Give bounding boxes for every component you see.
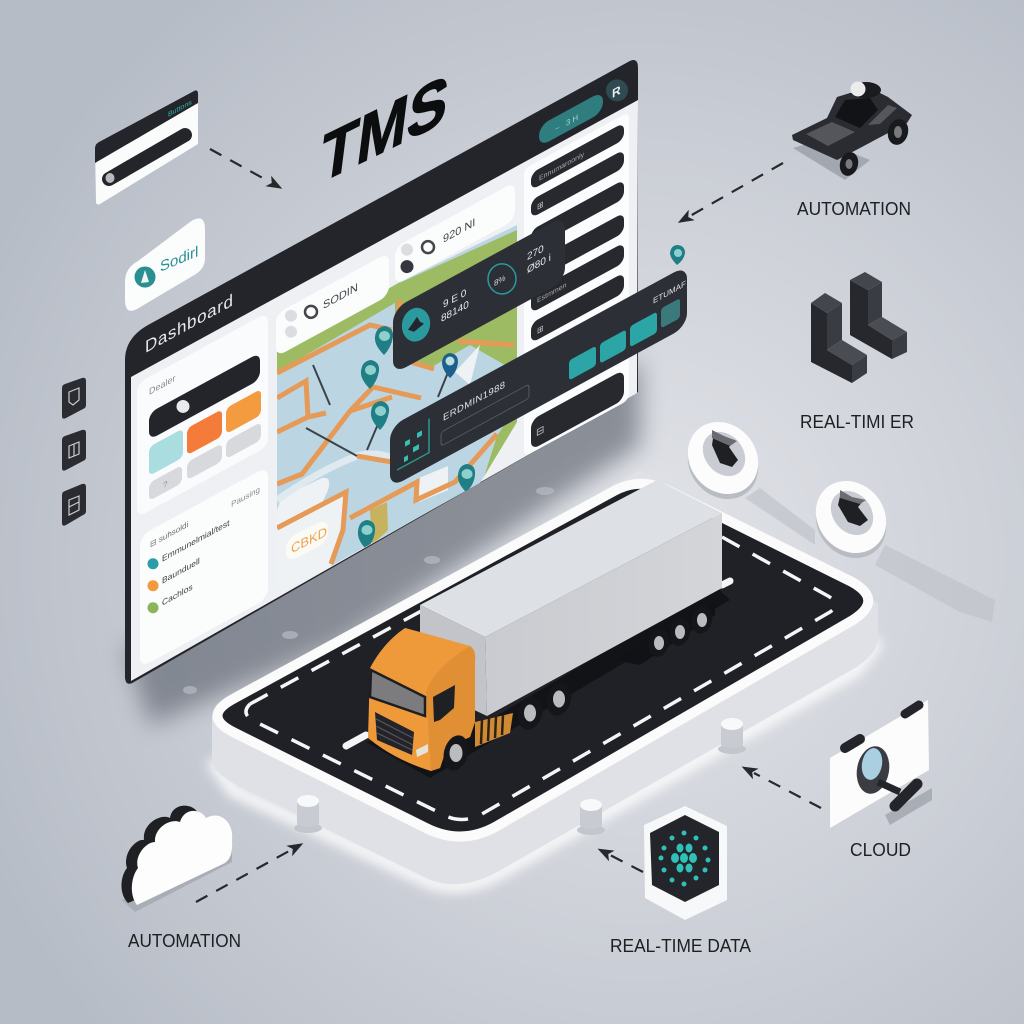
tile red orange <box>187 409 222 455</box>
tile gray one <box>149 465 182 501</box>
arrow: automation to dashboard <box>690 163 783 216</box>
row five: Estmmen <box>537 280 567 305</box>
cab body <box>368 628 475 771</box>
list row two <box>148 552 200 597</box>
dark dot <box>400 260 414 273</box>
map pin two <box>361 360 379 389</box>
teal square icon <box>397 419 429 470</box>
widget search dot <box>106 173 114 183</box>
panel: status card <box>137 312 268 517</box>
floating card: shipment stats <box>393 216 565 374</box>
tile marks: ? <box>163 478 168 490</box>
card: sodirl logo <box>125 218 205 311</box>
card label: 920 NI <box>443 216 475 246</box>
list row one <box>148 513 230 575</box>
card label: SODIN <box>323 281 358 312</box>
fuel tank <box>475 713 513 747</box>
header pill <box>539 91 603 147</box>
disc sensor one <box>673 408 773 513</box>
ring text: 8% <box>494 272 506 288</box>
label: dealer: Dealer <box>149 373 176 398</box>
list row two: Baunduell <box>162 556 200 586</box>
icon: real-time data chip <box>644 806 727 920</box>
ring icon <box>422 241 434 253</box>
middle wheels <box>514 679 575 733</box>
handle <box>878 782 900 792</box>
chip ring dots <box>658 830 710 886</box>
side window <box>433 685 455 722</box>
label: real-time er: REAL-TIMI ER <box>800 412 914 432</box>
vehicle shadow <box>793 140 870 180</box>
tile orange <box>226 389 261 434</box>
header button glyph: R <box>612 82 621 101</box>
platform base <box>212 470 878 884</box>
gray dot <box>401 244 413 256</box>
stat text two: Ø80 i <box>527 252 551 276</box>
vehicle dome <box>835 98 878 128</box>
icon: robot vehicle <box>792 82 912 180</box>
card: sodin <box>276 252 389 357</box>
button four <box>661 298 680 328</box>
side icon three <box>62 484 86 526</box>
status dot <box>176 400 190 413</box>
logo figure <box>141 270 149 283</box>
map orange roads <box>277 300 514 564</box>
vehicle body <box>792 93 912 160</box>
windshield <box>370 670 425 716</box>
widget search bar <box>109 135 185 179</box>
rear wheel hub <box>894 126 902 138</box>
arrow: camera to platform <box>754 773 821 808</box>
input field <box>441 384 529 446</box>
block front <box>811 293 867 383</box>
row one: Ennumaroonly <box>539 150 584 183</box>
row three <box>531 180 624 249</box>
chip inner <box>650 815 719 902</box>
vehicle deck <box>806 122 855 146</box>
tile teal <box>149 428 183 476</box>
road stub front <box>346 735 366 746</box>
teal ring <box>488 264 516 294</box>
row six <box>531 273 624 343</box>
list row three <box>148 577 193 619</box>
road surface <box>218 484 868 837</box>
cab <box>368 628 475 773</box>
row six: ⊞ <box>537 323 544 336</box>
dashboard body <box>131 100 638 681</box>
decorative footprints <box>183 487 554 694</box>
teal icon <box>399 305 433 344</box>
pin above controls card <box>670 245 685 265</box>
stat text two: 270 <box>527 243 544 263</box>
lens <box>853 744 893 796</box>
truck glyph <box>408 317 424 332</box>
floating card: controls <box>390 265 687 488</box>
icon: cloud <box>121 806 232 912</box>
map <box>270 220 525 600</box>
button one <box>569 346 596 380</box>
road dashes <box>246 502 836 820</box>
chip center dots <box>671 844 697 872</box>
vehicle side window <box>868 105 897 125</box>
card: search widget <box>95 90 198 205</box>
top cap <box>851 82 881 98</box>
platform <box>212 470 878 886</box>
label: automation top: AUTOMATION <box>797 199 911 219</box>
vehicle top ball <box>850 82 866 96</box>
disc shadows <box>745 488 995 622</box>
cloud shadow <box>122 848 232 912</box>
tile gray two <box>187 443 222 480</box>
shadow of dashboard panel <box>125 360 640 725</box>
row seven: ⊟ <box>536 423 544 439</box>
header label: dashboard: Dashboard <box>145 290 234 357</box>
platform glow <box>212 640 878 886</box>
label: ERDMIN1988 <box>443 380 505 424</box>
stat text one <box>441 286 469 325</box>
stat text two <box>527 239 551 276</box>
trailer side <box>485 513 722 716</box>
widget header <box>95 90 198 163</box>
list row one: Emmunelmial/test <box>162 517 230 564</box>
label: real-time data: REAL-TIME DATA <box>610 936 751 956</box>
side icon two <box>62 430 86 471</box>
grille <box>375 712 414 755</box>
row four <box>531 213 624 283</box>
map pin six <box>358 520 375 549</box>
tab right <box>905 705 919 714</box>
stat text one: 9 E 0 <box>443 287 466 311</box>
truck shadow <box>366 586 730 778</box>
title: TMS <box>316 59 453 199</box>
card shadow <box>885 788 932 825</box>
tab left <box>845 739 860 748</box>
truck <box>366 480 730 778</box>
handle grip <box>895 784 917 806</box>
stat text one: 88140 <box>441 299 469 325</box>
widget title: Buttons <box>168 97 192 119</box>
grille lines <box>376 719 413 750</box>
side icon one <box>62 378 86 419</box>
label: subtitle: ⊟ suhsoldi <box>150 519 188 549</box>
row two <box>531 150 624 218</box>
front wheel <box>837 150 861 178</box>
dark status bar <box>149 353 260 440</box>
cab side shade <box>426 646 475 771</box>
headlight <box>416 744 428 757</box>
map river <box>277 454 400 500</box>
gray dots <box>285 310 297 322</box>
wheel hubs <box>846 159 852 169</box>
row seven <box>531 370 624 450</box>
map yellow patch <box>370 502 388 545</box>
map pin five <box>458 464 475 492</box>
button two <box>600 329 626 364</box>
label: cloud: CLOUD <box>850 840 911 860</box>
controls label: ETUMAF <box>653 278 686 306</box>
label: pausing: Pausing <box>231 484 260 509</box>
rear wheel <box>885 117 911 147</box>
arrow: data to platform <box>610 855 643 872</box>
front wheel hub <box>450 744 462 762</box>
icon: L blocks <box>811 272 907 383</box>
ring icon <box>305 306 317 318</box>
arrow: cloud to platform <box>196 850 291 902</box>
arrow: search widget to title <box>210 149 270 182</box>
pedestal middle <box>577 799 605 835</box>
button three <box>630 312 657 347</box>
map label bubble: CBKD <box>291 524 327 556</box>
chip outer <box>644 806 727 920</box>
cloud back <box>121 806 225 903</box>
rear wheels <box>615 600 715 665</box>
pedestal left <box>294 795 322 833</box>
front wheel <box>440 733 472 773</box>
map pin four <box>442 353 458 378</box>
cloud front <box>132 811 232 905</box>
card body <box>830 700 929 828</box>
map pin three <box>371 401 389 430</box>
disc sensor two <box>801 467 901 572</box>
map pin one <box>375 326 393 355</box>
header pill text: ~ 3H <box>555 111 580 134</box>
trailer front <box>420 605 487 716</box>
list row three: Cachlos <box>162 581 193 608</box>
map dark routes <box>306 365 451 456</box>
panel: list card <box>140 466 268 668</box>
block rear <box>850 272 907 359</box>
tile gray three <box>226 422 261 459</box>
label: automation bottom: AUTOMATION <box>128 931 241 951</box>
trailer box <box>420 480 722 716</box>
header button <box>606 79 628 101</box>
lens glass <box>859 747 885 781</box>
panel: dashboard <box>125 60 687 684</box>
row two: ⊞ <box>537 199 544 212</box>
trailer top <box>420 480 722 637</box>
icon: camera card <box>830 700 932 828</box>
logo circle <box>134 266 156 288</box>
pedestal right <box>718 718 746 754</box>
map white areas <box>277 345 480 592</box>
card: metric <box>395 182 515 285</box>
gray dot lower <box>285 326 297 338</box>
logo text: Sodirl <box>160 243 198 276</box>
panel: right column <box>524 112 629 457</box>
dashboard frame <box>125 60 638 684</box>
row one <box>531 123 624 190</box>
road stub rear <box>722 581 730 585</box>
map green areas <box>277 230 517 483</box>
row five <box>531 243 624 313</box>
